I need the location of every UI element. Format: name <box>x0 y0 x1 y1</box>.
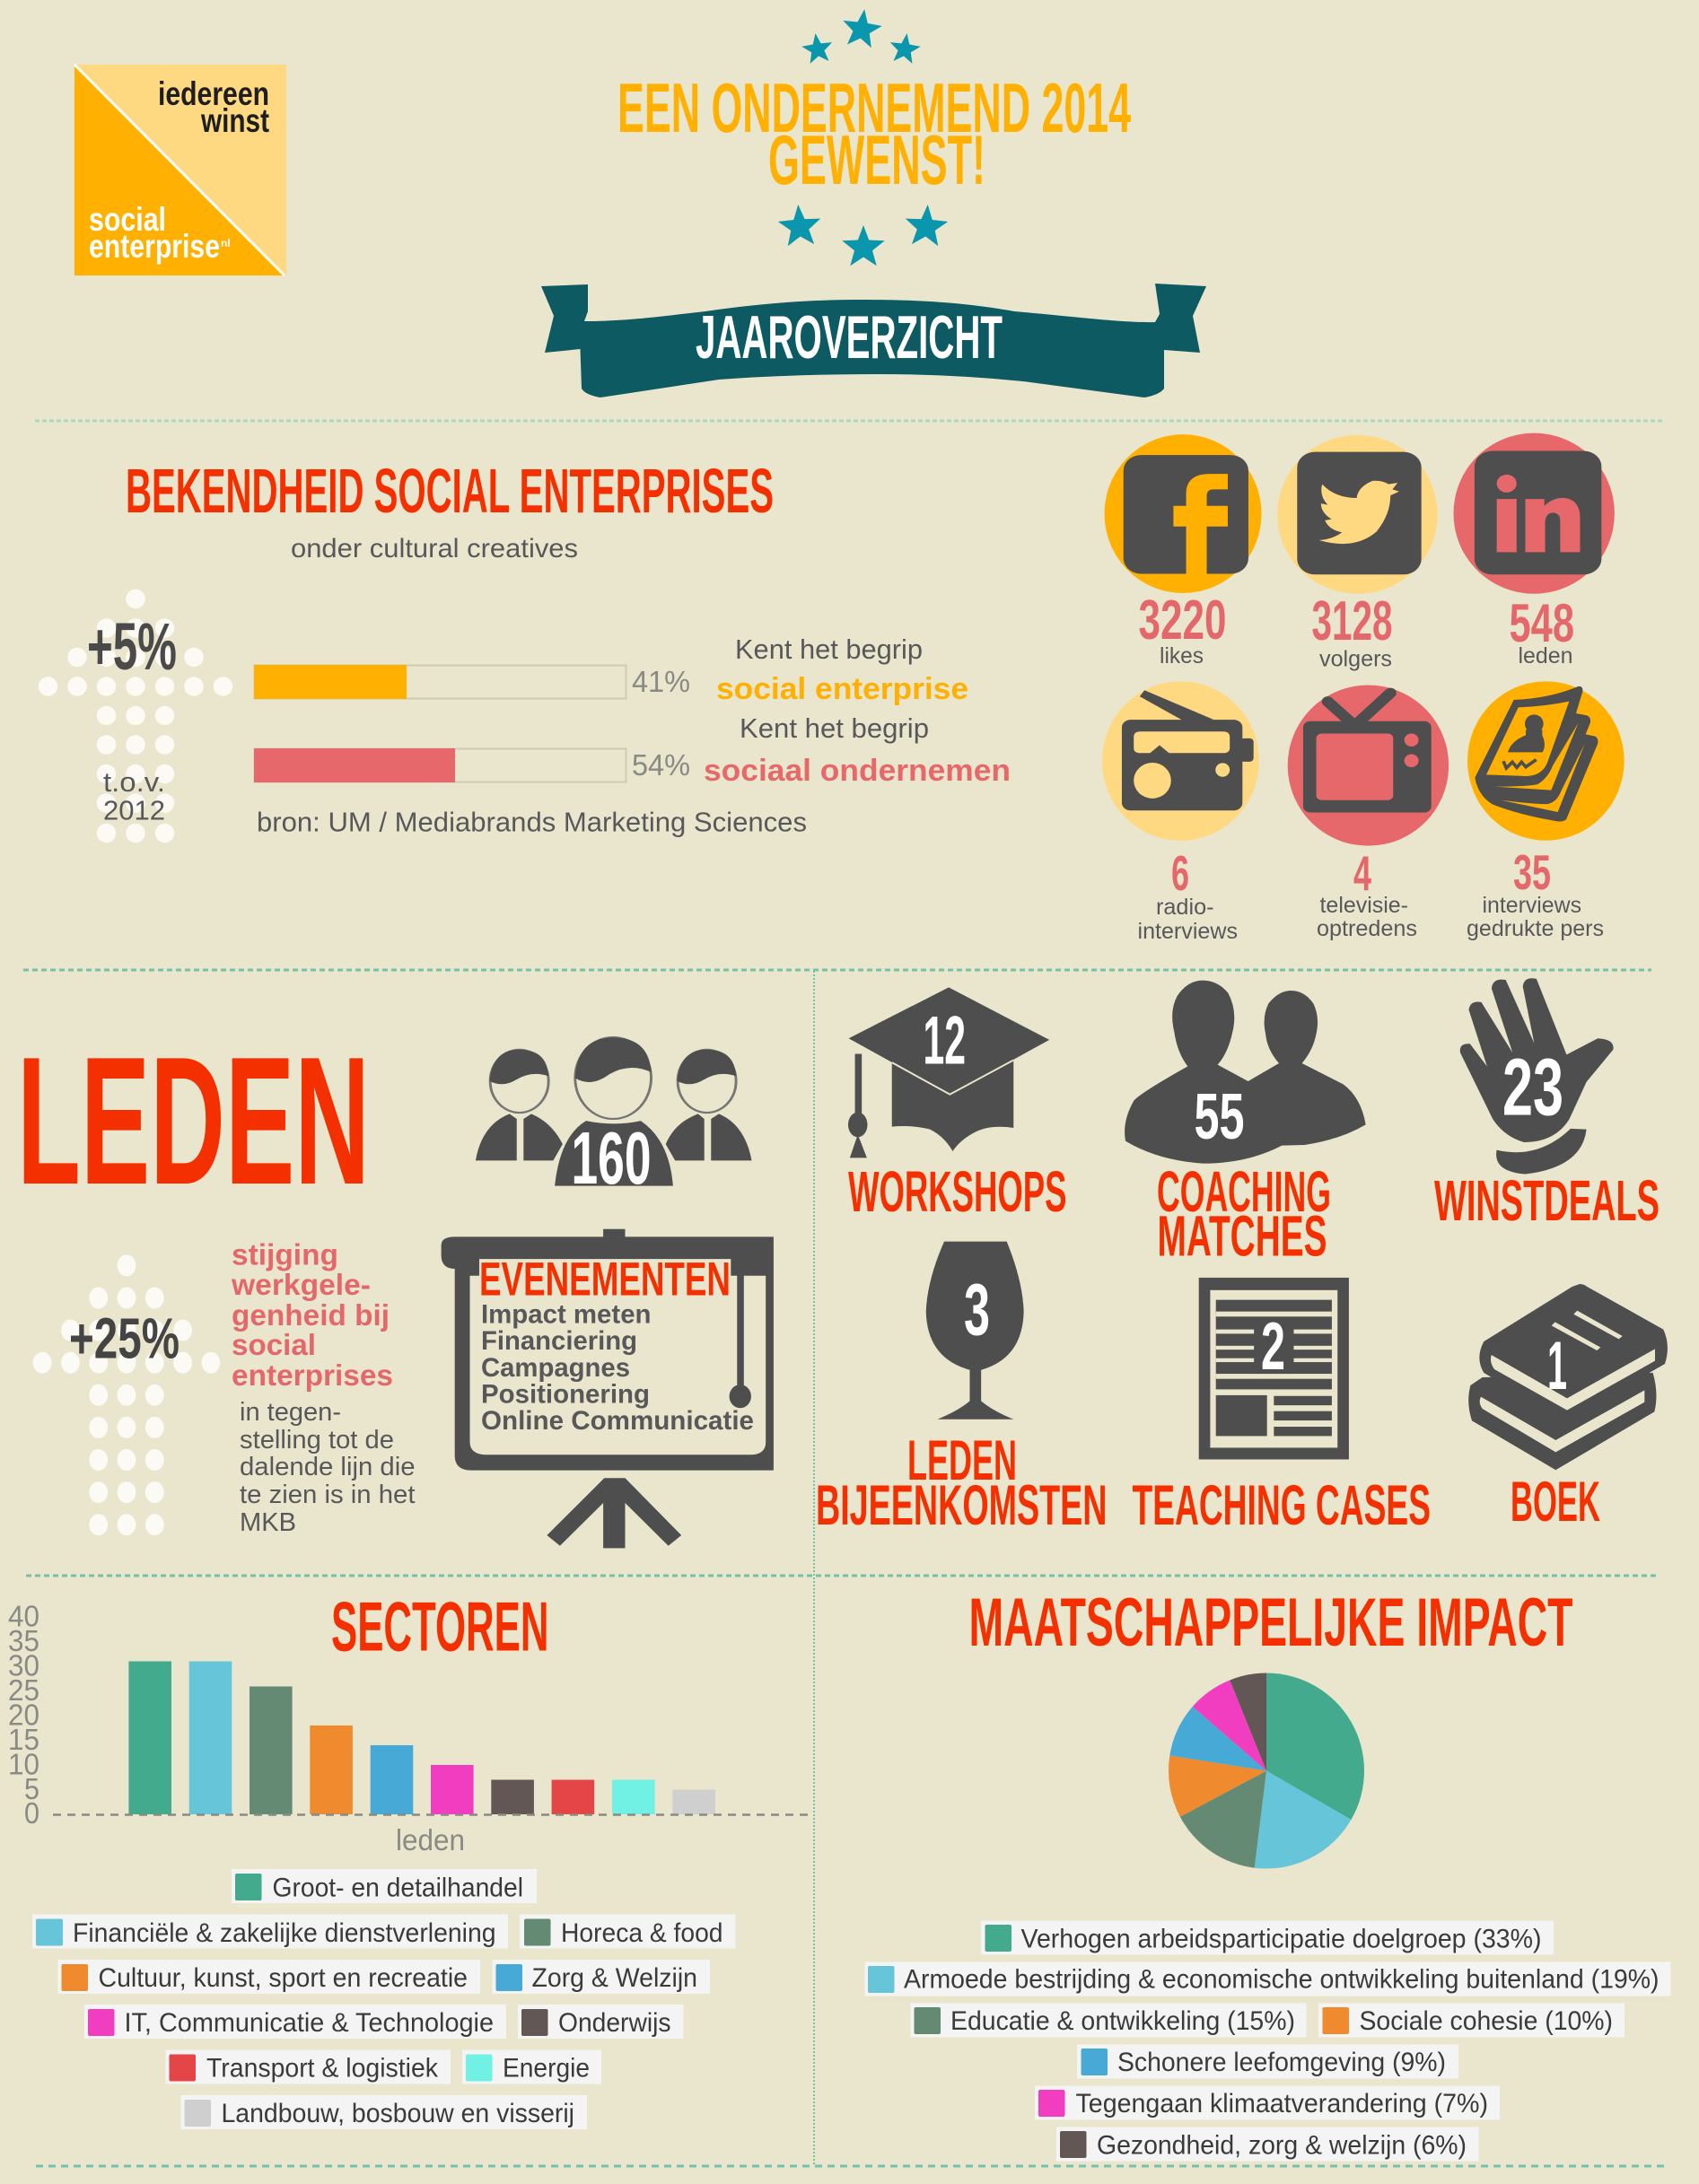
heading: leden bijeenkomsten <box>816 1429 1108 1537</box>
legend: impact: Tegengaan klimaatverandering (7%) <box>1075 2089 1488 2118</box>
stat: 3 leden bijeenkomsten: 3 <box>964 1269 990 1351</box>
stat: twitter followers: 3128 <box>1312 590 1393 652</box>
subheading: onder cultural creatives <box>291 534 578 563</box>
heading: teaching cases: TEACHING CASES <box>1133 1474 1431 1537</box>
bar chart: members per sector: 35 <box>8 1624 39 1657</box>
bar chart: members per sector: 30 <box>8 1649 39 1682</box>
source note: bron: UM / Mediabrands Marketing Sciences <box>257 806 807 838</box>
legend: impact <box>865 1920 1671 2161</box>
heading: boek: BOEK <box>1511 1471 1600 1533</box>
icon: three stars above title <box>801 6 922 65</box>
bar: social enterprise 41%: 41% <box>632 665 690 698</box>
stat: facebook likes <box>1138 590 1226 668</box>
heading: coaching matches: MATCHES <box>1158 1204 1327 1269</box>
icon: three people with 160 members <box>476 1037 752 1186</box>
legend: sectors: Landbouw, bosbouw en visserij <box>221 2099 574 2128</box>
list: event topics: Campagnes <box>481 1353 630 1383</box>
stat: television appearances: 4 <box>1353 845 1371 901</box>
bar chart: members per sector: 10 <box>8 1748 39 1780</box>
list: event topics: Online Communicatie <box>481 1406 754 1436</box>
icon: magazines <box>1467 681 1625 841</box>
list: event topics: Positionering <box>481 1380 650 1409</box>
text: tegenstelling mkb: te zien is in het <box>240 1481 415 1509</box>
label: kent het begrip social enterprise: Kent het begrip <box>735 633 923 665</box>
bar chart: members per sector: 40 <box>8 1599 39 1633</box>
icon: television <box>1288 686 1449 846</box>
bar chart: members per sector: 25 <box>8 1673 39 1707</box>
logo: iedereen winst social enterprise: winst <box>200 102 269 139</box>
text: tegenstelling mkb: in tegen- <box>240 1398 341 1427</box>
stat: television appearances: optredens <box>1317 916 1417 941</box>
stat: 160: 160 <box>571 1116 652 1200</box>
heading: sectoren: SECTOREN <box>331 1586 549 1665</box>
label: kent het begrip sociaal ondernemen: Kent het begrip <box>740 712 929 744</box>
text: stijging werkgelegenheid: genheid bij <box>232 1298 390 1332</box>
title <box>617 68 1131 199</box>
legend: impact: Schonere leefomgeving (9%) <box>1117 2048 1446 2077</box>
icon: three stars below title <box>777 203 949 266</box>
banner: jaaroverzicht <box>541 284 1206 397</box>
stat: +5%: +5% <box>87 609 177 684</box>
panel: maatschappelijke impact <box>865 1585 1671 2161</box>
bar: social enterprise 41% <box>254 665 690 699</box>
stat: +25%: +25% <box>69 1306 180 1371</box>
icon: radio <box>1102 681 1259 841</box>
logo: iedereen winst social enterprise: nl <box>221 237 231 249</box>
stat: radio interviews: interviews <box>1138 919 1238 944</box>
icon: presentation board <box>442 1229 774 1548</box>
stat: television appearances <box>1317 845 1417 941</box>
stat: facebook likes: 3220 <box>1138 590 1226 651</box>
text: tegenstelling mkb: dalende lijn die <box>240 1453 415 1481</box>
legend: sectors: Groot- en detailhandel <box>273 1874 523 1902</box>
stat: radio interviews: radio- <box>1156 895 1213 920</box>
icon: hand <box>1460 978 1614 1175</box>
bar chart: members per sector: 0 <box>24 1796 39 1830</box>
label: kent het begrip sociaal ondernemen: sociaal ondernemen <box>704 754 1011 788</box>
icon: books <box>1468 1284 1668 1470</box>
legend: impact: Armoede bestrijding & economische ontwikkeling buitenland (19%) <box>904 1965 1659 1994</box>
icon: dotted up arrow +25% <box>33 1254 220 1535</box>
logo: iedereen winst social enterprise: iedereen <box>158 75 269 112</box>
label: t.o.v. 2012 <box>103 766 165 826</box>
label: t.o.v. 2012: 2012 <box>103 795 165 826</box>
heading: evenementen: EVENEMENTEN <box>479 1253 731 1306</box>
legend: impact: Sociale cohesie (10%) <box>1359 2006 1613 2036</box>
legend: sectors: Energie <box>503 2053 590 2084</box>
icon: graduation cap <box>848 987 1049 1158</box>
stat: twitter followers: volgers <box>1319 646 1392 671</box>
label: kent het begrip sociaal ondernemen <box>704 712 1011 788</box>
legend: sectors: Cultuur, kunst, sport en recreatie <box>99 1963 468 1993</box>
heading: workshops: WORKSHOPS <box>848 1159 1066 1224</box>
icon: dotted up arrow +5% <box>39 590 232 843</box>
legend: sectors: Onderwijs <box>558 2008 671 2038</box>
label: kent het begrip social enterprise <box>716 633 968 706</box>
text: stijging werkgelegenheid: enterprises <box>232 1358 393 1392</box>
bar: sociaal ondernemen 54%: 54% <box>632 748 690 782</box>
title: EEN ONDERNEMEND 2014 <box>617 68 1131 147</box>
text: stijging werkgelegenheid: social <box>232 1328 316 1361</box>
panel: sectoren <box>8 1586 808 2129</box>
icon: twitter <box>1277 435 1438 594</box>
icon: glass <box>926 1242 1024 1420</box>
bar chart: members per sector <box>8 1599 808 1856</box>
label: t.o.v. 2012: t.o.v. <box>103 766 165 798</box>
panel: social media and press <box>1102 433 1625 944</box>
stat: press interviews <box>1467 844 1604 941</box>
icon: newspaper <box>1199 1278 1349 1459</box>
panel: bekendheid social enterprises <box>39 456 1011 843</box>
legend: sectors: IT, Communicatie & Technologie <box>124 2008 494 2038</box>
icon: facebook <box>1104 434 1262 593</box>
legend: sectors <box>32 1869 736 2129</box>
legend: impact: Educatie & ontwikkeling (15%) <box>950 2006 1295 2036</box>
bar chart: members per sector: 20 <box>8 1698 39 1732</box>
heading: leden bijeenkomsten: BIJEENKOMSTEN <box>816 1474 1108 1537</box>
heading: bekendheid: BEKENDHEID SOCIAL ENTERPRISES <box>126 456 774 526</box>
label: kent het begrip social enterprise: social enterprise <box>716 672 968 706</box>
stat: radio interviews: 6 <box>1171 845 1189 901</box>
heading: coaching matches <box>1157 1159 1331 1269</box>
stat: press interviews: interviews <box>1483 893 1581 918</box>
legend: sectors: Financiële & zakelijke dienstverlening <box>73 1918 495 1948</box>
text: stijging werkgelegenheid: stijging <box>232 1238 338 1271</box>
text: stijging werkgelegenheid <box>231 1238 393 1392</box>
stat: radio interviews <box>1138 845 1238 944</box>
legend: impact: Gezondheid, zorg & welzijn (6%) <box>1097 2130 1467 2161</box>
stat: linkedin members: leden <box>1519 643 1572 668</box>
stat: linkedin members: 548 <box>1510 593 1574 653</box>
banner: jaaroverzicht: JAAROVERZICHT <box>696 303 1003 371</box>
heading: leden bijeenkomsten: LEDEN <box>907 1429 1017 1492</box>
stat: 12 workshops: 12 <box>923 1003 966 1079</box>
stat: 1 boek: 1 <box>1547 1328 1567 1404</box>
logo: iedereen winst social enterprise: social <box>89 201 166 238</box>
text: stijging werkgelegenheid: werkgele- <box>231 1268 371 1301</box>
stat: 23 winstdeals: 23 <box>1502 1043 1563 1132</box>
stat: television appearances: televisie- <box>1319 893 1408 918</box>
heading: coaching matches: COACHING <box>1157 1159 1331 1224</box>
legend: sectors: Transport & logistiek <box>206 2053 439 2084</box>
title: GEWENST! <box>768 120 985 199</box>
bar chart: members per sector: 15 <box>8 1723 39 1756</box>
stat: linkedin members <box>1510 593 1574 668</box>
icon: linkedin <box>1453 433 1615 594</box>
logo: iedereen winst social enterprise: enterprise <box>89 228 220 265</box>
stat: press interviews: gedrukte pers <box>1467 916 1604 941</box>
panel: activiteiten <box>816 978 1668 1537</box>
pie chart: impact shares <box>1169 1673 1364 1869</box>
logo: iedereen winst social enterprise <box>74 65 286 275</box>
list: event topics: Impact meten <box>481 1299 652 1330</box>
list: event topics <box>481 1299 754 1436</box>
list: event topics: Financiering <box>481 1326 637 1356</box>
text: tegenstelling mkb <box>240 1398 415 1537</box>
icon: two person silhouettes <box>1125 981 1366 1164</box>
bar chart: members per sector: leden <box>396 1823 465 1856</box>
heading: leden: LEDEN <box>17 1019 370 1223</box>
panel: leden <box>17 1019 774 1548</box>
text: tegenstelling mkb: stelling tot de <box>240 1426 394 1455</box>
stat: facebook likes: likes <box>1160 643 1204 668</box>
bar chart: members per sector: 5 <box>24 1772 39 1805</box>
stat: 55 coaching matches: 55 <box>1194 1081 1244 1153</box>
bar: sociaal ondernemen 54% <box>254 748 690 782</box>
text: tegenstelling mkb: MKB <box>240 1508 296 1537</box>
legend: sectors: Horeca & food <box>561 1918 723 1948</box>
stat: twitter followers <box>1312 590 1393 671</box>
stat: press interviews: 35 <box>1513 844 1551 900</box>
legend: impact: Verhogen arbeidsparticipatie doelgroep (33%) <box>1021 1924 1542 1954</box>
legend: sectors: Zorg & Welzijn <box>531 1963 697 1993</box>
stat: 2 teaching cases: 2 <box>1261 1308 1285 1384</box>
